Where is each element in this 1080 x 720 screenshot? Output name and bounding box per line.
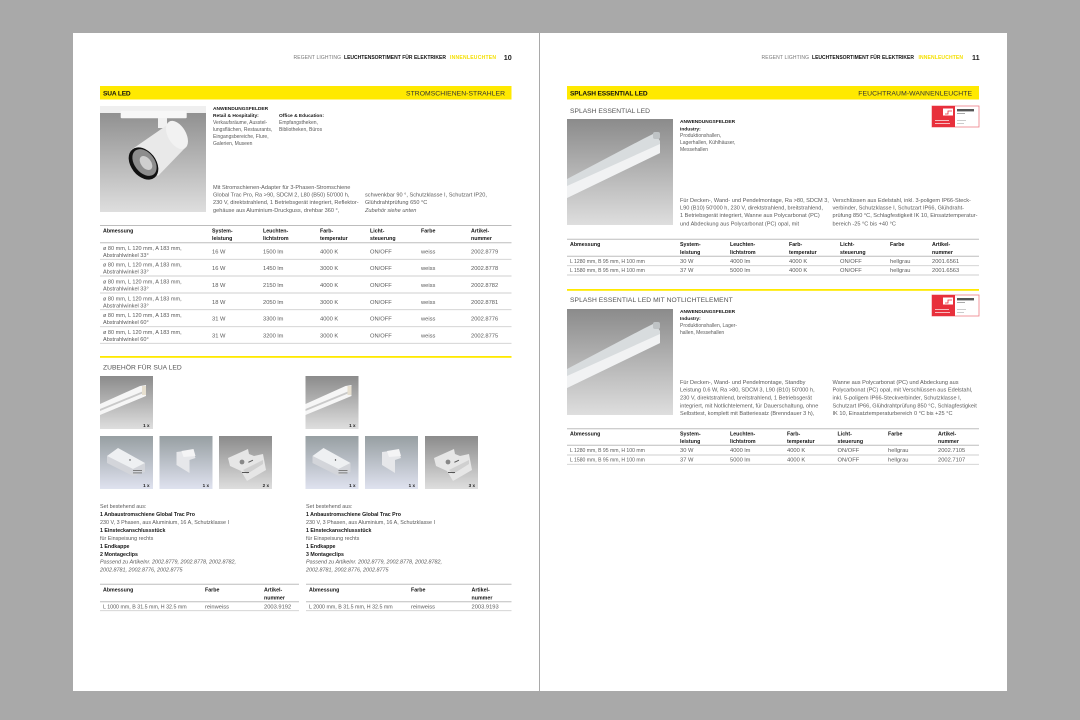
text: application fields 2: ANWENDUNGSFELDER [680,309,736,315]
text: application fields 2 [680,309,737,336]
text: set 2 contents: 3 Montageclips [306,552,344,558]
table: emergency version variants: ON/OFF [838,448,860,454]
table: SUA LED variants: 18 W [212,300,226,306]
table: SUA LED variants: leistung [212,236,232,242]
text: application fields 1: ANWENDUNGSFELDER [680,119,736,125]
table: emergency version variants: 2002.7107 [938,458,965,464]
table: SUA LED variants: Abstrahlwinkel 33° [103,253,149,259]
table: Splash variants: 4000 K [789,268,807,274]
text: application fields SUA LED: Office & Education: [279,113,324,119]
text: application fields SUA LED [213,106,324,147]
subheading: accessories: ZUBEHÖR FÜR SUA LED [103,363,182,371]
text: application fields SUA LED: ANWENDUNGSFELDER [213,106,269,112]
table: emergency version variants: 37 W [680,458,694,464]
table: emergency version variants: nummer [938,439,959,445]
text: SUA LED description: gehäuse aus Aluminium-Druckguss, drehbar 360 °, [213,208,340,214]
table: SUA LED variants [100,226,512,343]
table: SUA LED variants: temperatur [320,236,348,242]
text: application fields SUA LED: Retail & Hospitality: [213,113,259,119]
table: Splash variants: 2001.6563 [932,268,959,274]
text: set 2 contents: 230 V, 3 Phasen, aus Aluminium, 16 A, Schutzklasse I [306,520,435,526]
page header right: REGENT LIGHTING [762,55,809,61]
table: SUA LED variants: 18 W [212,283,226,289]
table: emergency version variants [567,429,979,464]
table: Splash variants: 4000 lm [730,259,751,265]
text: set 1 contents: 1 Anbaustromschiene Global Trac Pro [100,512,195,518]
text: application fields 1 [680,119,736,153]
table: Splash variants: Artikel- [932,242,950,248]
table: Splash variants: 37 W [680,268,694,274]
page header left: LEUCHTENSORTIMENT FÜR ELEKTRIKER [344,54,446,61]
heading bar: SPLASH ESSENTIAL LED: SPLASH ESSENTIAL LED [570,90,648,97]
accessory images: set 2 [306,376,478,489]
table: SUA LED variants: ø 80 mm, L 120 mm, A 183 mm, [103,279,182,285]
heading bar: SUA LED: SUA LED [103,90,131,97]
text: set 1 contents: 1 Einsteckanschlussstück [100,528,165,534]
text: application fields 1: Produktionshallen, [680,133,721,139]
table: SUA LED variants: Abstrahlwinkel 60° [103,337,149,343]
text: set 2 contents: 1 Anbaustromschiene Global Trac Pro [306,512,401,518]
accessory images: set 1 [100,376,272,489]
table: SUA LED variants: 2002.8778 [471,266,498,272]
table: SUA LED variants: ON/OFF [370,334,392,340]
table: Splash variants: 30 W [680,259,694,265]
table: Splash variants: lichtstrom [730,250,756,256]
text: set 1 contents: für Einspeisung rechts [100,536,154,542]
table: SUA LED variants: 2002.8775 [471,334,498,340]
table: emergency version variants: leistung [680,439,700,445]
text: emergency version description: integriert, mit Notlichtelement, für Dauerschaltung, ohne [680,404,818,410]
text: Splash description: prüfung 850 °C, Schlagfestigkeit IK 10, Einsatztemperatur- [832,213,978,219]
table: Splash variants: 5000 lm [730,268,751,274]
table: SUA LED variants: Leuchten- [263,228,289,234]
text: application fields 1: Messehallen [680,147,708,153]
table: Splash variants: ON/OFF [840,259,862,265]
table: SUA LED variants: steuerung [370,236,396,242]
table: SUA LED variants: Abstrahlwinkel 33° [103,286,149,292]
table: Splash variants: Farbe [890,242,904,248]
table: emergency version variants: hellgrau [888,458,908,464]
table: SUA LED variants: Farb- [320,228,333,234]
table: set 2: reinweiss [411,605,435,611]
table: emergency version variants: Farbe [888,432,902,438]
text: set 1 contents [99,504,236,574]
table: Splash variants: Licht- [840,242,855,248]
badge: Minergie label 2 [932,295,979,316]
table: SUA LED variants: 2050 lm [263,300,284,306]
text: set 1 contents: Passend zu Artikelnr. 2002.8779, 2002.8778, 2002.8782, [100,560,236,566]
table: SUA LED variants: 4000 K [320,283,338,289]
table: SUA LED variants: ø 80 mm, L 120 mm, A 183 mm, [103,296,182,302]
table: SUA LED variants: ø 80 mm, L 120 mm, A 183 mm, [103,246,182,252]
text: emergency version description [680,380,977,417]
table: emergency version variants: Artikel- [938,432,956,438]
table: Splash variants: nummer [932,250,953,256]
heading bar: SPLASH ESSENTIAL LED [567,86,979,100]
table: SUA LED variants: 31 W [212,334,226,340]
table: emergency version variants: System- [680,432,701,438]
text: set 2 contents: für Einspeisung rechts [306,536,360,542]
text: Splash description: verbinder, Schutzklasse I, Schutzart IP66, Glühdraht- [832,206,964,212]
table: SUA LED variants: nummer [471,236,492,242]
text: application fields SUA LED: Eingangsbereiche, Flure, [213,134,269,140]
text: application fields 2: Produktionshallen, Lager- [680,323,737,329]
text: emergency version description: Schutzart IP66, Glühdrahtprüfung 850 °C, Schlagfestigkeit [832,404,977,410]
table: SUA LED variants: 3000 K [320,300,338,306]
accessory images: set 2: 1 x [409,483,415,488]
text: SUA LED description: Zubehör siehe unten [364,208,416,214]
table: Splash variants: temperatur [789,250,817,256]
table: set 2: 2003.9193 [472,605,499,611]
table: SUA LED variants: 2002.8782 [471,283,498,289]
table: SUA LED variants: 2002.8779 [471,250,498,256]
heading bar: SUA LED: STROMSCHIENEN-STRAHLER [406,90,505,97]
text: set 2 contents [305,504,442,574]
text: Splash description: 1 Betriebsgerät integriert, Wanne aus Polycarbonat (PC) [680,213,820,219]
table: SUA LED variants: 1500 lm [263,250,284,256]
panel: right page 11 [540,33,1007,691]
accessory images: set 2: 1 x [349,483,356,488]
table: SUA LED variants: 2002.8776 [471,317,498,323]
table: Splash variants: System- [680,242,701,248]
text: application fields SUA LED: Empfangstheken, [279,120,318,126]
text: set 1 contents: 2002.8781, 2002.8776, 2002.8775 [99,568,183,574]
text: application fields 2: Industry: [680,316,701,322]
text: set 2 contents: 1 Einsteckanschlussstück [306,528,371,534]
table: Splash variants: hellgrau [890,259,910,265]
text: application fields SUA LED: Verkaufsräume, Ausstel- [213,120,268,126]
text: Splash description: L90 (B10) 50'000 h, 230 V, direktstrahlend, breitstrahlend, [680,206,823,212]
table: SUA LED variants: ON/OFF [370,283,392,289]
table: SUA LED variants: weiss [420,300,436,306]
text: application fields SUA LED: Bibliotheken, Büros [279,127,323,133]
table: Splash variants: L 1580 mm, B 95 mm, H 100 mm [570,268,645,274]
text: set 2 contents: 1 Endkappe [306,544,336,550]
page header left: REGENT LIGHTING [294,55,341,61]
table: emergency version variants: lichtstrom [730,439,756,445]
table: set 2: Artikel- [472,588,490,594]
accessory images: set 1: 1 x [143,423,150,428]
text: set 1 contents: 2 Montageclips [100,552,138,558]
table: SUA LED variants: Farbe [421,228,435,234]
text: Splash description: Verschlüssen aus Edelstahl, inkl. 3-poligem IP66-Steck- [832,198,971,204]
table: SUA LED variants: Artikel- [471,228,489,234]
table: emergency version variants: Abmessung [570,432,600,438]
table: SUA LED variants: weiss [420,317,436,323]
table: SUA LED variants: ON/OFF [370,317,392,323]
text: set 2 contents: Passend zu Artikelnr. 2002.8779, 2002.8778, 2002.8782, [306,560,442,566]
table: Splash variants: 2001.6561 [932,259,959,265]
text: SUA LED description: schwenkbar 90 °, Schutzklasse I, Schutzart IP20, [365,193,487,199]
text: application fields 2: hallen, Messehallen [680,330,724,336]
page header left [294,53,512,62]
text: set 1 contents: 230 V, 3 Phasen, aus Aluminium, 16 A, Schutzklasse I [100,520,229,526]
table: SUA LED variants: 2002.8781 [471,300,498,306]
table: emergency version variants: Leuchten- [730,432,756,438]
table: emergency version variants: L 1580 mm, B 95 mm, H 100 mm [570,458,645,464]
table: SUA LED variants: ON/OFF [370,250,392,256]
table: SUA LED variants: 4000 K [320,250,338,256]
accessory images: set 2: 1 x [349,423,356,428]
product photo: Splash with emergency element [567,309,673,415]
table: set 1: nummer [264,596,285,602]
accessory images: set 1: 2 x [263,483,269,488]
table: Splash variants: hellgrau [890,268,910,274]
text: emergency version description: Leistung 0.6 W, Ra >80, SDCM 3, L90 (B10) 50'000 h, [680,388,815,394]
table: SUA LED variants: Abstrahlwinkel 33° [103,303,149,309]
table: SUA LED variants: 1450 lm [263,266,284,272]
page header right: INNENLEUCHTEN [918,55,963,61]
text: emergency version description: inkl. 5-poligem IP66-Steckverbinder, Schutzklasse I, [832,396,962,402]
badge: Minergie label 1 [932,106,979,127]
product photo: Splash Essential LED [567,119,673,225]
page header right: LEUCHTENSORTIMENT FÜR ELEKTRIKER [812,54,914,61]
table: SUA LED variants: 16 W [212,250,226,256]
table: SUA LED variants: Abstrahlwinkel 60° [103,320,149,326]
heading bar: SUA LED [100,86,512,100]
page header left: INNENLEUCHTEN [450,55,496,61]
table: emergency version variants: 4000 K [787,448,805,454]
text: SUA LED description [213,185,487,214]
table: SUA LED variants: Licht- [370,228,385,234]
table: SUA LED variants: 3300 lm [263,317,284,323]
table: emergency version variants: Farb- [787,432,800,438]
table: emergency version variants: 4000 lm [730,448,751,454]
text: set 1 contents: 1 Endkappe [100,544,130,550]
table: emergency version variants: hellgrau [888,448,908,454]
text: emergency version description: Für Decken-, Wand- und Pendelmontage, Standby [680,380,806,386]
table: set 1: Artikel- [264,588,282,594]
table: emergency version variants: L 1280 mm, B 95 mm, H 100 mm [570,448,645,454]
table: set 1: Farbe [205,588,219,594]
table: emergency version variants: Licht- [838,432,852,438]
text: application fields SUA LED: lungsflächen, Restaurants, [213,127,272,133]
table: emergency version variants: steuerung [838,439,863,445]
table: set 1: L 1000 mm, B 31.5 mm, H 32.5 mm [103,605,187,611]
table: SUA LED variants: System- [212,228,233,234]
text: emergency version description: Polycarbonat (PC) opal, mit Verschlüssen aus Edelstahl, [832,388,973,394]
text: emergency version description: Selbsttest, komplett mit Batteriesatz (Brenndauer 3 h), [680,411,815,417]
table: SUA LED variants: 16 W [212,266,226,272]
table: set 1: 2003.9192 [264,605,291,611]
table: set 1 [100,584,299,611]
table: SUA LED variants: ON/OFF [370,300,392,306]
table: SUA LED variants: weiss [420,283,436,289]
product photo: SUA LED track spotlight [100,106,206,212]
table: SUA LED variants: 3000 K [320,266,338,272]
table: Splash variants: leistung [680,250,700,256]
table: SUA LED variants: 4000 K [320,317,338,323]
text: set 1 contents: Set bestehend aus: [100,504,146,510]
subheading: with emergency light: SPLASH ESSENTIAL LED MIT NOTLICHTELEMENT [570,297,733,304]
table: emergency version variants: ON/OFF [838,458,860,464]
table: emergency version variants: temperatur [787,439,815,445]
table: set 1: Abmessung [103,588,133,594]
page header right [762,53,980,62]
text: application fields 1: Industry: [680,126,701,132]
table: SUA LED variants: weiss [420,250,436,256]
table: SUA LED variants: ø 80 mm, L 120 mm, A 183 mm, [103,263,182,269]
text: emergency version description: Wanne aus Polycarbonat (PC) und Abdeckung aus [832,380,959,386]
subheading: Splash Essential LED: SPLASH ESSENTIAL LED [570,108,650,115]
page header left: 10 [504,53,512,62]
accessory images: set 2: 3 x [469,483,475,488]
table: emergency version variants: 30 W [680,448,694,454]
table: set 2: Abmessung [309,588,339,594]
table: Splash variants: Abmessung [570,242,600,248]
text: SUA LED description: Glühdrahtprüfung 650 °C [365,200,427,206]
table: SUA LED variants: ø 80 mm, L 120 mm, A 183 mm, [103,330,182,336]
text: emergency version description: 230 V, direktstrahlend, breitstrahlend, 1 Betriebsgerät [680,396,812,402]
table: Splash variants: ON/OFF [840,268,862,274]
accessory images: set 1: 1 x [203,483,209,488]
text: Splash description: bereich -25 °C bis +40 °C [832,221,896,227]
text: set 2 contents: 2002.8781, 2002.8776, 2002.8775 [305,568,389,574]
text: SUA LED description: Global Trac Pro, Ra >90, SDCM 2, L80 (B50) 50'000 h, [213,193,350,199]
table: emergency version variants: 4000 K [787,458,805,464]
accessory images: set 1: 1 x [143,483,150,488]
table: SUA LED variants: weiss [420,266,436,272]
text: application fields SUA LED: Galerien, Museen [213,141,253,147]
text: Splash description: und Abdeckung aus Polycarbonat (PC) opal, mit [680,221,800,227]
table: set 2: Farbe [411,588,425,594]
table: Splash variants: L 1280 mm, B 95 mm, H 100 mm [570,259,645,265]
table: set 2: L 2000 mm, B 31.5 mm, H 32.5 mm [309,605,393,611]
table: Splash variants: steuerung [840,250,866,256]
heading bar: SPLASH ESSENTIAL LED: FEUCHTRAUM-WANNENLEUCHTE [858,90,972,97]
table: SUA LED variants: lichtstrom [263,236,289,242]
table: set 2 [306,584,512,611]
table: SUA LED variants: 3200 lm [263,334,284,340]
page header right: 11 [972,53,980,62]
table: SUA LED variants: 31 W [212,317,226,323]
table: set 1: reinweiss [205,605,229,611]
table: Splash variants [567,239,979,275]
table: SUA LED variants: ON/OFF [370,266,392,272]
table: SUA LED variants: ø 80 mm, L 120 mm, A 183 mm, [103,313,182,319]
table: Splash variants: Leuchten- [730,242,756,248]
table: SUA LED variants: weiss [420,334,436,340]
text: emergency version description: IK 10, Einsatztemperaturbereich 0 °C bis +25 °C [832,411,952,417]
table: SUA LED variants: Abmessung [103,228,133,234]
table: Splash variants: Farb- [789,242,802,248]
table: SUA LED variants: Abstrahlwinkel 33° [103,270,149,276]
text: Splash description: Für Decken-, Wand- und Pendelmontage, Ra >80, SDCM 3, [680,198,829,204]
text: set 2 contents: Set bestehend aus: [306,504,352,510]
table: SUA LED variants: 3000 K [320,334,338,340]
table: emergency version variants: 2002.7105 [938,448,965,454]
text: Splash description [680,198,978,227]
text: SUA LED description: 230 V, direktstrahlend, 1 Betriebsgerät integriert, Reflektor- [213,200,359,206]
table: set 2: nummer [472,596,492,602]
table: emergency version variants: 5000 lm [730,458,751,464]
panel: left page 10 [73,33,539,691]
text: SUA LED description: Mit Stromschienen-Adapter für 3-Phasen-Stromschiene [213,185,350,191]
table: Splash variants: 4000 K [789,259,807,265]
text: application fields 1: Lagerhallen, Kühlhäuser, [680,140,735,146]
table: SUA LED variants: 2150 lm [263,283,284,289]
